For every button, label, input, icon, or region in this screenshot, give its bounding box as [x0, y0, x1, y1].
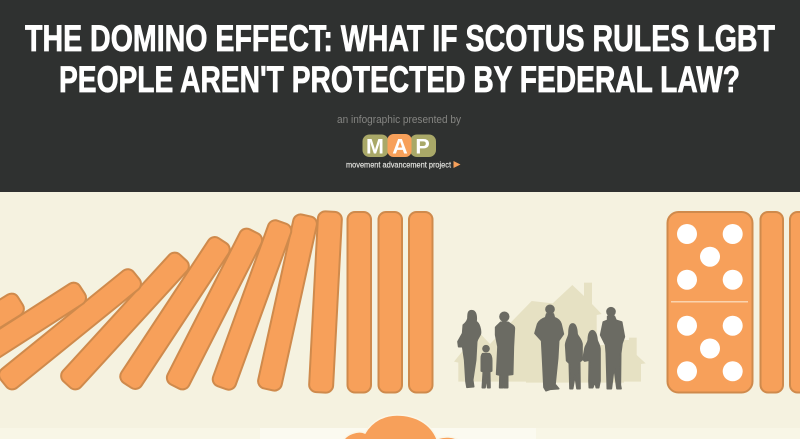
- family silhouettes: [458, 305, 624, 391]
- presented by text: an infographic presented by: [337, 114, 461, 126]
- falling dominoes: [0, 211, 342, 402]
- MAP logo: movement advancement project: [346, 160, 452, 170]
- header band: [0, 0, 800, 192]
- MAP logo: M: [366, 134, 384, 158]
- houses and family silhouettes: [454, 283, 646, 391]
- MAP logo: A: [392, 134, 408, 158]
- MAP logo: [346, 134, 460, 170]
- MAP logo: P: [415, 134, 430, 158]
- houses: [454, 283, 646, 383]
- right standing dominoes: [760, 212, 800, 392]
- lower section panels: [0, 428, 800, 439]
- large five-five domino: [668, 212, 752, 392]
- title: [25, 18, 775, 100]
- standing dominoes: [348, 212, 432, 392]
- cloud: [343, 415, 460, 439]
